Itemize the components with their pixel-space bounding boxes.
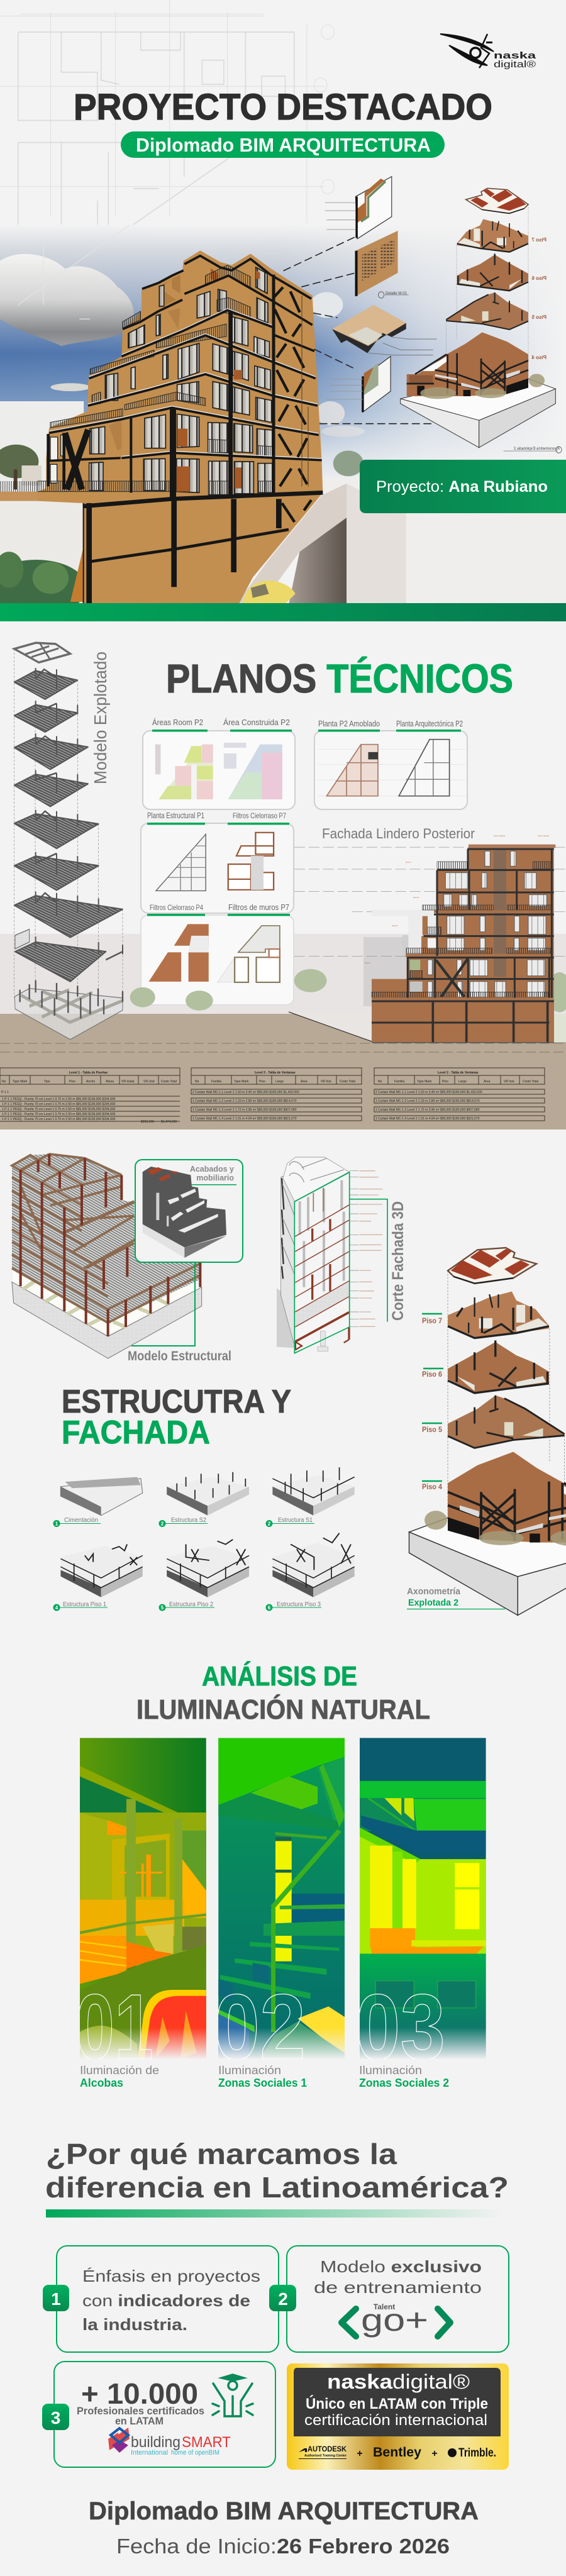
- window glazing: [89, 267, 274, 495]
- card 4: certification: Único en LATAM con Triple: [306, 2395, 488, 2412]
- talent go+ logo: go+: [361, 2302, 428, 2338]
- logo: buildingSMART: International: [131, 2449, 168, 2457]
- axonometry label: Explotada 2: [408, 1597, 458, 1608]
- connector line: [131, 1262, 195, 1346]
- sequence badges: [53, 1520, 273, 1611]
- blueprint background: [0, 0, 335, 361]
- foundation pier: [318, 1331, 328, 1351]
- stair core: [494, 850, 506, 977]
- project author box: [360, 460, 566, 513]
- logo: naska digital: naska: [494, 50, 536, 61]
- detail: perforated brick panel: [355, 231, 398, 296]
- schedule table: doors: 1 P-1 1 PESQ - Puerta 70 cm Level 1 0.70 m 2.50 m $95,000 $199,900 $294,900: [2, 1108, 116, 1111]
- elevation windows: [428, 851, 547, 997]
- grade line: [372, 1041, 554, 1044]
- red columns: [21, 1154, 200, 1336]
- logo: buildingSMART: home of openBIM: [171, 2449, 219, 2457]
- mirrored labels: Detalle M-01: [386, 292, 408, 296]
- schedule table: doors: Ancho: [86, 1080, 95, 1084]
- caption 2: [218, 2064, 307, 2089]
- step: S2: [167, 1472, 249, 1516]
- panel: áreas: Área Construida P2: [223, 718, 290, 727]
- card 4: certification: naska digital®: [327, 2370, 470, 2393]
- construction sequence: [53, 1467, 355, 1611]
- schedule table: doors: VR Und: [143, 1080, 155, 1084]
- building: [0, 250, 323, 604]
- closing title: Diplomado BIM ARQUITECTURA: [89, 2497, 479, 2525]
- schedule table: doors: Type Mark: [13, 1080, 28, 1084]
- schedule table: windows B: Piso: [442, 1080, 448, 1084]
- small facade annotations: [365, 835, 550, 964]
- structural model: [12, 1154, 202, 1358]
- clouds: [0, 254, 365, 437]
- sequence badges: 2: [161, 1521, 164, 1527]
- gradient underline: [46, 2209, 504, 2218]
- small facade annotations: Nivel cubierta: [494, 835, 506, 837]
- hero backdrop: [0, 0, 566, 616]
- interior warm tones: [177, 269, 260, 492]
- panel: estructural: [141, 811, 294, 913]
- talent go+ logo: Talent: [374, 2302, 395, 2311]
- exploded axonometry: [401, 188, 555, 448]
- partner logos: +: [357, 2448, 363, 2459]
- card 4: certification: [287, 2363, 509, 2470]
- facade title: Fachada Lindero Posterior: [322, 826, 475, 841]
- schedule table: doors: 1 P-1 1 PESQ - Puerta 70 cm Level 1 0.70 m 2.50 m $95,000 $199,900 $294,900: [2, 1097, 116, 1101]
- shaded brick faces: [158, 275, 180, 306]
- title: ILUMINACIÓN NATURAL: [136, 1694, 430, 1725]
- schedule table: windows B: Largo: [458, 1080, 467, 1084]
- schedule table: windows A: Type Mark: [234, 1080, 249, 1084]
- partner logos: AUTODESK: [308, 2445, 347, 2453]
- site dashed levels and trees: [130, 847, 566, 1013]
- card 2: Modelo exclusivo: [320, 2257, 482, 2276]
- logo: buildingSMART: building: [131, 2434, 180, 2451]
- step: piso 3: [272, 1533, 355, 1597]
- mirrored labels: Piso 5: [531, 314, 547, 320]
- badge 2: [269, 2285, 296, 2311]
- sequence labels: Estructura S1: [278, 1517, 313, 1524]
- floors in brown: [295, 1205, 349, 1327]
- vertical label: Corte Fachada 3D: [389, 1201, 407, 1321]
- outlined number 01: 01: [75, 1975, 153, 2079]
- schedule table: doors: 1 P-1 1 PESQ - Puerta 70 cm Level 1 0.70 m 2.50 m $95,000 $199,900 $294,900: [2, 1113, 116, 1116]
- schedule table: windows A: [191, 1068, 362, 1121]
- schedule table: windows A: 1 Curtain Wall MC-1.3 Level 2 1.72 m 3.96 m² $95,000 $180,000 $907,080: [192, 1108, 297, 1112]
- panel: filtros: [141, 902, 294, 1005]
- panel: estructural: Filtros Cielorraso P7: [233, 811, 286, 820]
- thin vertical joints: [302, 296, 308, 486]
- panel: áreas: [143, 718, 295, 809]
- title: PROYECTO DESTACADO: [74, 87, 492, 128]
- leader captions: [360, 1171, 382, 1326]
- green cut outline: [294, 1172, 350, 1353]
- axonometry label: Axonometría: [407, 1586, 461, 1597]
- 3D facade cut: [277, 1157, 387, 1353]
- badge 1: [43, 2285, 69, 2311]
- outlined number 03: 03: [355, 1975, 445, 2079]
- card 1: [43, 2246, 279, 2352]
- schedule table: windows A: 2 Curtain Wall MC-1.1 Level 2 1.50 m 3.45 m² $95,000 $180,000 $1,432,000: [192, 1091, 299, 1094]
- railings: [38, 265, 274, 495]
- schedule table: doors: $1,474,500: [161, 1120, 177, 1124]
- rear facade elevation: [372, 845, 555, 1043]
- sequence labels: Estructura S2: [171, 1517, 206, 1524]
- card 1: Énfasis en proyectos: [82, 2267, 260, 2285]
- partner logos: +: [431, 2448, 438, 2459]
- schedule table: doors: [0, 1068, 180, 1124]
- detail: floor: [332, 305, 437, 355]
- partner logos: [299, 2445, 496, 2460]
- brick volumes: [372, 848, 554, 1043]
- trees and bushes: [0, 445, 94, 616]
- panel: análisis de iluminación natural: [75, 1660, 486, 2089]
- schedule table: windows A: Familia: [211, 1080, 221, 1084]
- detail tag: [379, 292, 409, 298]
- title: PLANOS TÉCNICOS: [166, 656, 513, 701]
- small facade annotations: Nivel 4: [365, 962, 371, 964]
- card 3: + 10.000: [81, 2377, 198, 2410]
- badge 1: 1: [51, 2289, 61, 2309]
- panel: filtros: Filtros de muros P7: [228, 902, 289, 912]
- schedule table: doors: Altura: [106, 1080, 114, 1084]
- sequence badges: 5: [161, 1605, 164, 1611]
- schedule table: windows B: VR Inst.: [504, 1080, 515, 1084]
- step: S1: [272, 1467, 355, 1516]
- icon: graduate: [213, 2375, 253, 2416]
- schedule table: windows B: Level 2 - Tabla de Ventanas: [438, 1071, 479, 1075]
- axonometry exploded: [409, 1248, 566, 1615]
- inset: acabados: Acabados y: [190, 1165, 234, 1174]
- floor labels: [422, 1316, 442, 1491]
- sequence labels: Cimentación: [64, 1517, 98, 1524]
- panel: estructural: Planta Estructural P1: [147, 811, 204, 820]
- schedule table: windows B: Type Mark: [417, 1080, 432, 1084]
- card 2: [269, 2246, 509, 2352]
- caption 1: Iluminación de: [80, 2064, 159, 2077]
- schedule table: windows B: 1 Curtain Wall MC-1.4 Level 2 1.91 m 4.04 m² $95,000 $180,000 $921,570: [375, 1117, 480, 1121]
- heading: diferencia en Latinoamérica?: [45, 2171, 509, 2204]
- sequence badges: 6: [268, 1605, 271, 1611]
- card 2: de entrenamiento: [314, 2278, 482, 2297]
- schedule table: windows B: Costo Total: [523, 1080, 538, 1084]
- model label: Modelo Estructural: [128, 1349, 231, 1363]
- mirrored labels: [386, 237, 560, 451]
- card 3: [42, 2362, 275, 2467]
- frame: [372, 849, 554, 1043]
- schedule table: doors: Level 1 - Tabla de Puertas: [69, 1071, 108, 1075]
- card 3: en LATAM: [115, 2415, 164, 2427]
- facade backing: [372, 910, 436, 958]
- title: ESTRUCUTRA Y: [62, 1384, 291, 1420]
- inset: acabados: [135, 1160, 243, 1262]
- panel: filtros: Filtros Cielorraso P4: [150, 903, 203, 912]
- talent go+ logo: [341, 2302, 450, 2338]
- sky right fade: [0, 217, 566, 489]
- schedule table: windows A: Piso: [259, 1080, 265, 1084]
- caption 3: [359, 2064, 449, 2089]
- badge 3: [42, 2404, 69, 2430]
- schedule table: doors: No: [2, 1080, 6, 1084]
- schedule table: windows B: 1 Curtain Wall MC-1.2 Level 2 1.33 m 2.89 m² $95,000 $180,000 $814,570: [375, 1099, 480, 1103]
- heat image 2: [218, 1738, 345, 2059]
- pill subtitle: Diplomado BIM ARQUITECTURA: [136, 134, 431, 156]
- axonometry tag: [504, 447, 562, 453]
- schedule table: windows A: VR Inst.: [321, 1080, 332, 1084]
- detail: lower wall: [326, 357, 391, 412]
- vertical label: Modelo Explotado: [91, 652, 110, 784]
- title: [62, 1384, 291, 1451]
- diagonal braces: [274, 287, 311, 522]
- panel: áreas: Áreas Room P2: [152, 718, 203, 727]
- schedule table: doors: Costo Total: [161, 1080, 177, 1084]
- schedule table: windows A: 1 Curtain Wall MC-1.2 Level 2 1.33 m 2.89 m² $95,000 $180,000 $814,570: [192, 1099, 297, 1103]
- sequence badges: 4: [55, 1605, 58, 1611]
- terrace ledges: [372, 910, 552, 1000]
- car: [243, 580, 296, 604]
- slabs and columns: [48, 256, 323, 604]
- mirrored labels: Axonometría Explotada 2: [514, 447, 560, 451]
- schedule table: windows B: [374, 1068, 545, 1121]
- sequence labels: Estructura Piso 2: [169, 1601, 213, 1608]
- schedule table: doors: $999,500: [141, 1120, 154, 1124]
- site backdrop: [0, 934, 566, 1130]
- brick massing: [38, 250, 323, 604]
- heat image 1: [80, 1738, 206, 2059]
- ground and neighbouring block: [0, 401, 566, 604]
- mirrored labels: Piso 4: [531, 355, 547, 360]
- slab highlights: [49, 309, 322, 458]
- schedule table: windows B: 2 Curtain Wall MC-1.1 Level 2 1.50 m 3.45 m² $95,000 $180,000 $1,432,000: [375, 1091, 482, 1094]
- exterior side: [281, 1176, 294, 1346]
- image bottom fades: [80, 2028, 486, 2060]
- partner logos: Bentley: [373, 2445, 421, 2460]
- partner logos: Trimble.: [458, 2446, 496, 2460]
- caption 2: Zonas Sociales 1: [218, 2077, 307, 2089]
- sequence badges: 1: [55, 1521, 58, 1527]
- title: [136, 1660, 430, 1725]
- small facade annotations: Nivel 7: [406, 861, 412, 863]
- timber beams: [12, 1154, 201, 1323]
- blueprint overlay on sky: [18, 225, 130, 319]
- open ground level: [13, 1253, 201, 1335]
- mirrored labels: Piso 6: [531, 275, 547, 281]
- caption 3: Iluminación: [359, 2064, 422, 2077]
- sequence badges: 2: [268, 1521, 271, 1527]
- caption 2: Iluminación: [218, 2064, 281, 2077]
- title: FACHADA: [62, 1414, 210, 1451]
- logo: naska digital: digital®: [494, 59, 536, 70]
- step: piso 1: [60, 1545, 143, 1597]
- schedule table: doors: 1 P-1 1 PESQ - Puerta 70 cm Level 1 0.70 m 2.50 m $95,000 $199,900 $294,900: [2, 1102, 116, 1106]
- title: ANÁLISIS DE: [202, 1660, 357, 1692]
- mirrored labels: Piso 7: [531, 237, 547, 243]
- start date: Fecha de Inicio: 26 Febrero 2026: [116, 2534, 450, 2558]
- logo: buildingSMART: SMART: [182, 2434, 231, 2451]
- roof cap: [469, 845, 555, 848]
- sequence labels: Estructura Piso 3: [277, 1601, 321, 1608]
- schedule table: windows B: 1 Curtain Wall MC-1.3 Level 2 1.72 m 3.96 m² $95,000 $180,000 $907,080: [375, 1108, 480, 1112]
- inset: acabados: mobiliario: [196, 1174, 234, 1182]
- cast shadow: [277, 1288, 294, 1348]
- schedule table: windows A: 1 Curtain Wall MC-1.4 Level 2 1.91 m 4.04 m² $95,000 $180,000 $921,570: [192, 1117, 297, 1121]
- card 1: con indicadores de: [82, 2291, 250, 2310]
- section face: [294, 1172, 350, 1353]
- panel: planos técnicos: [0, 643, 566, 1130]
- sequence labels: [63, 1517, 321, 1608]
- schedule table: windows A: Área: [301, 1079, 308, 1084]
- detail dashed connectors: [284, 236, 435, 424]
- floor tag lines: [422, 1314, 443, 1481]
- exploded details: [325, 177, 437, 412]
- card 1: la industria.: [82, 2315, 187, 2334]
- schedule table: windows B: Familia: [394, 1080, 404, 1084]
- schedule table: doors: Piso: [69, 1080, 75, 1084]
- schedule table: doors: Tipo: [44, 1080, 50, 1084]
- axonometry label: [390, 1586, 505, 1629]
- schedule table: doors: P-1 1: [1, 1091, 9, 1094]
- small facade annotations: Nivel 6: [413, 896, 419, 899]
- schedule table: windows A: No: [195, 1080, 199, 1084]
- floor labels: Piso 4: [422, 1482, 442, 1491]
- partner logos: Authorized Training Center: [304, 2454, 347, 2458]
- project author box: Proyecto: Ana Rubiano: [376, 478, 548, 496]
- panel: estructura y fachada: [12, 1154, 566, 1629]
- facade railings: [372, 862, 552, 997]
- heading: [45, 2138, 509, 2204]
- steel deck lattice: [12, 1154, 201, 1323]
- step: cimentación: [60, 1477, 143, 1516]
- outlined number 02: 02: [214, 1975, 306, 2079]
- floor labels: Piso 6: [422, 1370, 442, 1379]
- schedule table: doors: VR Instal.: [121, 1080, 135, 1084]
- sequence labels: Estructura Piso 1: [63, 1601, 106, 1608]
- caption 1: Alcobas: [80, 2077, 123, 2089]
- heat image 3: [360, 1738, 486, 2059]
- schedule table: doors: 1 P-1 1 PESQ - Puerta 70 cm Level 1 0.70 m 2.50 m $95,000 $199,900 $294,900: [2, 1118, 116, 1121]
- roof: [283, 1157, 349, 1201]
- schedule table: windows A: Costo Total: [340, 1080, 355, 1084]
- card 4: certification: certificación internacional: [304, 2412, 487, 2429]
- panel: por qué marcamos la diferencia: [42, 2138, 509, 2558]
- exploded model stack: [14, 643, 123, 1040]
- panel: plantas: Planta P2 Amoblado: [318, 719, 380, 728]
- panel: plantas: Planta Arquitectónica P2: [396, 719, 463, 728]
- badge 3: 3: [51, 2408, 60, 2428]
- schedule table: windows B: Área: [484, 1079, 491, 1084]
- panel: plantas: [314, 719, 467, 809]
- schedule table: windows A: Largo: [275, 1080, 284, 1084]
- sequence underlines: [58, 1523, 321, 1607]
- floor labels: Piso 5: [422, 1425, 442, 1434]
- sky: [0, 225, 566, 482]
- caption 1: [80, 2064, 159, 2089]
- leader lines: [350, 1171, 359, 1326]
- panel: hero section: [0, 0, 566, 621]
- badge 2: 2: [278, 2289, 288, 2309]
- step: piso 2: [167, 1540, 249, 1597]
- small facade annotations: Nivel 5: [392, 924, 398, 927]
- caption 3: Zonas Sociales 2: [359, 2077, 449, 2089]
- detail: wall corner: [325, 177, 392, 239]
- schedule table: windows B: No: [378, 1080, 382, 1084]
- foundation block: [12, 1282, 202, 1358]
- schedule table: windows A: Level 2 - Tabla de Ventanas: [255, 1071, 296, 1075]
- small facade annotations: Nivel cubierta: [538, 835, 550, 837]
- logo: buildingSMART: [108, 2428, 231, 2457]
- floor labels: Piso 7: [422, 1316, 442, 1325]
- side insets: [410, 938, 436, 992]
- card 3: Profesionales certificados: [77, 2405, 204, 2417]
- logo: naska digital: [440, 34, 536, 70]
- heading: ¿Por qué marcamos la: [46, 2138, 397, 2170]
- green divider band: [0, 603, 566, 621]
